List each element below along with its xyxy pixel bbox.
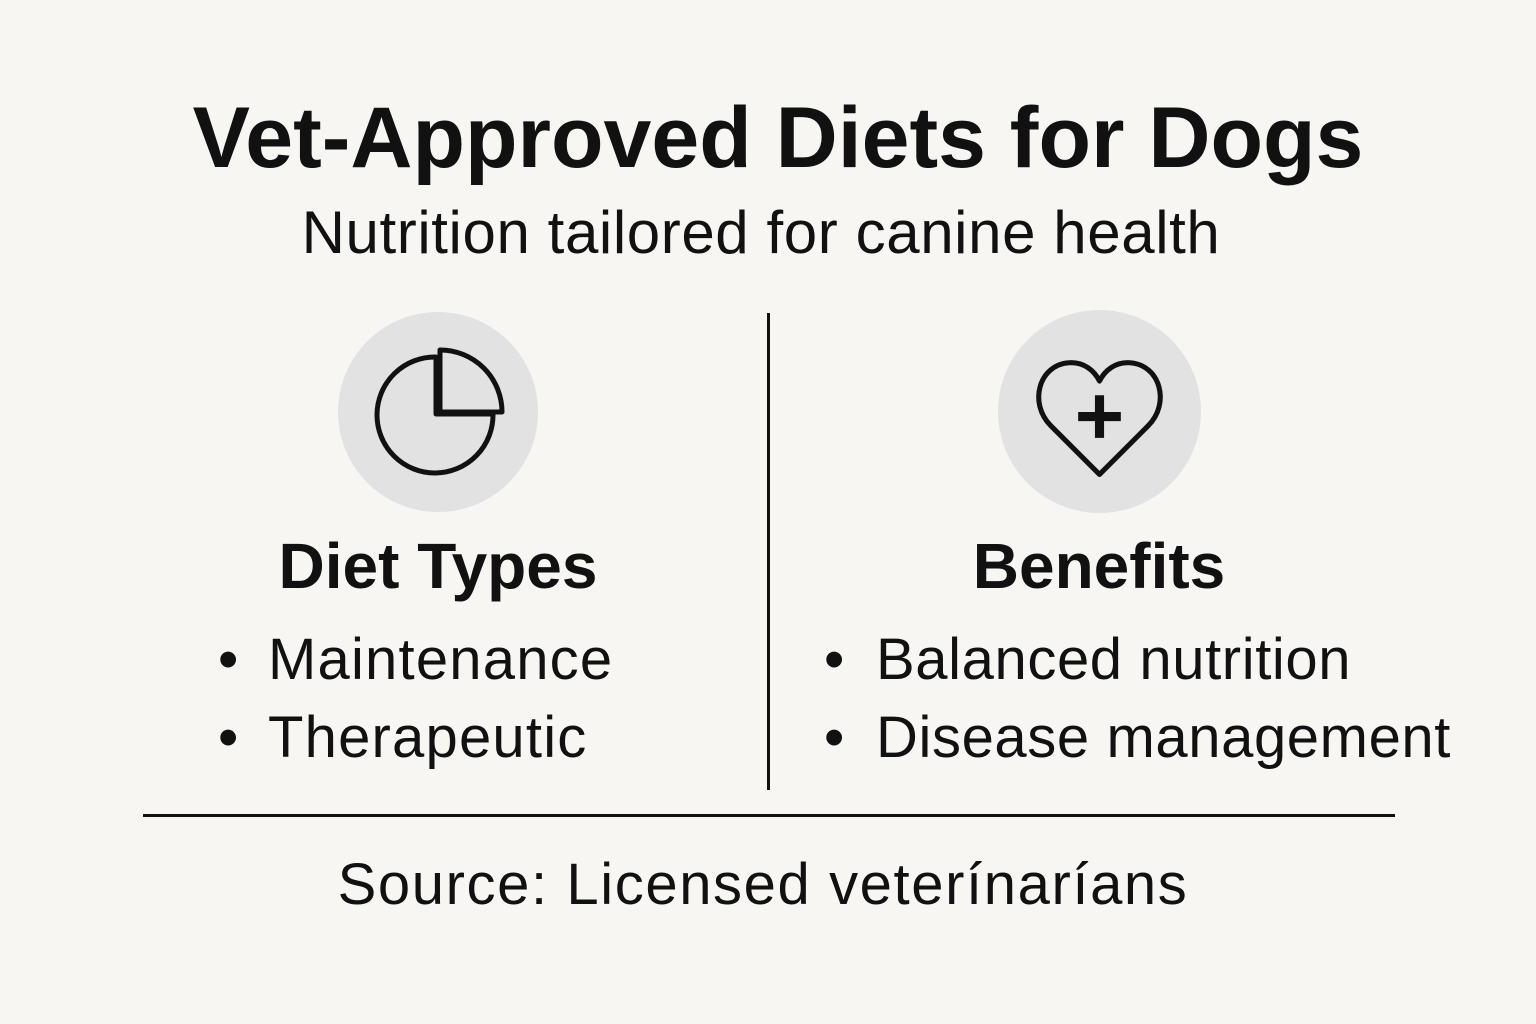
vertical divider: [767, 313, 770, 790]
subtitle: Nutrition tailored for canine health: [302, 199, 1220, 266]
heading: Benefits: Benefits: [973, 530, 1225, 602]
bullet list: Therapeutic: [268, 705, 587, 770]
panel: diet types: [218, 312, 613, 770]
bullet list: •: [218, 627, 238, 692]
bullet list: •: [824, 627, 844, 692]
bullet list: Maintenance: [268, 627, 613, 692]
bullet list: •: [824, 705, 844, 770]
icon: pie chart: [338, 312, 538, 512]
bullet list: Balanced nutrition: [876, 627, 1351, 692]
bullet list: [824, 627, 1451, 770]
bullet list: [218, 627, 613, 770]
source note: Source: Licensed veterínaríans: [338, 852, 1188, 917]
bullet list: Disease management: [876, 705, 1451, 770]
heading: Diet Types: Diet Types: [279, 530, 597, 602]
title: Vet-Approved Diets for Dogs: [193, 90, 1363, 186]
horizontal divider: [143, 814, 1395, 817]
bullet list: •: [218, 705, 238, 770]
icon: heart with plus: [998, 310, 1201, 513]
panel: benefits: [824, 310, 1451, 770]
